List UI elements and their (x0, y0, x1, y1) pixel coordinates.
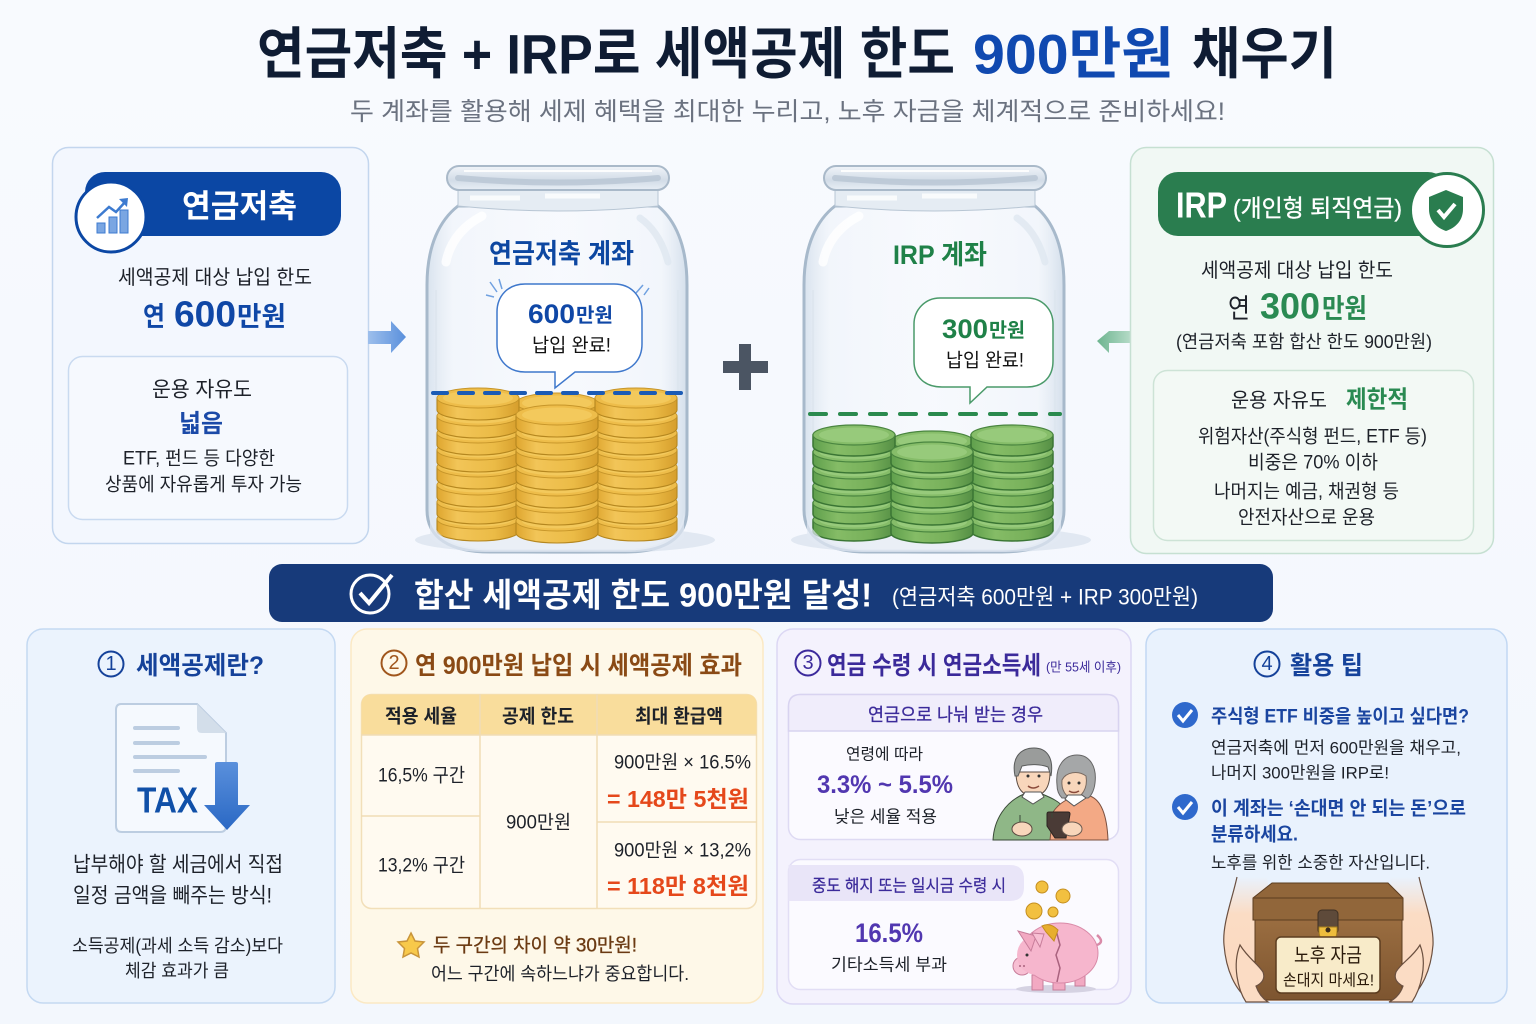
icon: star (398, 933, 424, 957)
jar: IRP 계좌 (791, 166, 1091, 554)
box: 운용 자유도 제한적: 위험자산(주식형 펀드, ETF 등) (1198, 425, 1427, 447)
illustration: locked chest in hands (1224, 877, 1433, 1002)
icon: growth chart (76, 182, 146, 252)
table: 환급액 (361, 694, 757, 908)
box: 운용 자유도: 넓음 (179, 410, 223, 438)
heading: 활용 팁 (1290, 652, 1363, 680)
label: 납입 한도: 세액공제 대상 납입 한도 (118, 266, 312, 289)
value: 연 300만원: 연 (1228, 294, 1250, 324)
box: 운용 자유도 제한적: 비중은 70% 이하 (1248, 451, 1378, 473)
heading: 3 (802, 652, 814, 674)
table: 환급액: 900만원 (506, 811, 571, 833)
value: 연 300만원: 300 (1260, 285, 1320, 326)
icon: tax document: TAX (137, 779, 198, 820)
tip 1: 주식형 ETF 비중을 높이고 싶다면? (1211, 705, 1469, 727)
callout: 600만원 납입 완료: 600 (528, 299, 575, 329)
box: 운용 자유도: ETF, 펀드 등 다양한 (123, 447, 275, 469)
table: 환급액: 공제 한도 (502, 705, 574, 727)
pill header: IRP (1158, 172, 1448, 236)
box: 연금 수령: 연금으로 나눠 받는 경우 (868, 705, 1043, 725)
arrow: to IRP jar (1097, 331, 1130, 353)
icon: check 1 (1172, 702, 1198, 728)
table: 환급액: = 118만 8천원 (607, 873, 749, 899)
tip 2: 노후를 위한 소중한 자산입니다. (1211, 853, 1430, 872)
box: 운용 자유도 제한적: 안전자산으로 운용 (1238, 506, 1375, 528)
box: 운용 자유도: 운용 자유도 (152, 378, 252, 401)
note: 구간 차이 (431, 934, 689, 984)
box: 일시금 수령: 기타소득세 부과 (831, 955, 947, 974)
box: 일시금 수령: 중도 해지 또는 일시금 수령 시 (812, 876, 1006, 895)
banner: 합산 한도 달성 (269, 564, 1273, 622)
note: 구간 차이: 두 구간의 차이 약 30만원! (433, 934, 637, 956)
tip 2: 분류하세요. (1211, 823, 1298, 845)
value: 연 600만원 (143, 293, 286, 334)
box: 일시금 수령 (788, 860, 1118, 990)
heading (1254, 652, 1363, 680)
heading: 4 (1261, 653, 1273, 675)
callout: 300만원 납입 완료 (914, 298, 1053, 403)
table: 환급액: 900만원 × 13,2% (614, 839, 751, 861)
note: 구간 차이: 어느 구간에 속하느냐가 중요합니다. (431, 964, 689, 984)
limit line: blue dashed (433, 391, 682, 395)
tip 1: 나머지 300만원을 IRP로! (1211, 763, 1389, 782)
callout: 600만원 납입 완료 (486, 279, 649, 388)
panel: ③ 연금소득세 (777, 629, 1131, 1004)
icon: tax document (116, 704, 250, 832)
text: 설명 (73, 853, 283, 907)
pill header: IRP: IRP (1176, 184, 1227, 225)
text: 비교 (72, 936, 283, 981)
title: 연금저축 + IRP로 세액공제 한도 (257, 22, 955, 85)
heading: 1 (105, 653, 117, 675)
icon: check 2 (1172, 794, 1198, 820)
box: 연금 수령: 낮은 세율 적용 (834, 807, 937, 826)
coins: gold stacks (437, 388, 677, 543)
text: 설명: 납부해야 할 세금에서 직접 (73, 853, 283, 876)
value: 연 600만원: 만원 (237, 302, 286, 332)
value: 연 300만원: 만원 (1322, 294, 1367, 324)
value: 연 600만원: 연 (143, 302, 165, 332)
callout: 600만원 납입 완료: 만원 (576, 304, 613, 327)
box: 운용 자유도 제한적: 나머지는 예금, 채권형 등 (1214, 480, 1399, 502)
callout: 300만원 납입 완료: 납입 완료! (946, 349, 1024, 371)
callout: 600만원 납입 완료: 납입 완료! (532, 334, 611, 356)
jar: 연금저축 계좌 (415, 166, 715, 554)
panel: ① 세액공제란 (27, 629, 335, 1003)
heading: 세액공제란? (136, 652, 264, 680)
text: 설명: 일정 금액을 빼주는 방식! (73, 884, 272, 907)
box: 운용 자유도 제한적: 운용 자유도 (1231, 389, 1327, 412)
title: 채우기 (1192, 22, 1337, 85)
jar label: 연금저축 계좌 (489, 239, 634, 269)
pill header: 연금저축 (85, 172, 341, 236)
value: 연 600만원: 600 (174, 293, 236, 334)
subtitle: 두 계좌를 활용해 세제 혜택을 최대한 누리고, 노후 자금을 체계적으로 준비하세요! (350, 98, 1225, 126)
pill header: 연금저축: 연금저축 (182, 188, 297, 224)
table: 환급액: = 148만 5천원 (607, 786, 749, 812)
icon: check circle (351, 575, 392, 613)
box: 연금 수령 (788, 694, 1118, 840)
illustration: locked chest in hands: 손대지 마세요! (1283, 971, 1374, 989)
table: 환급액: 13,2% 구간 (378, 854, 465, 876)
pill header: IRP: (개인형 퇴직연금) (1233, 195, 1402, 222)
callout: 300만원 납입 완료: 300 (942, 314, 988, 344)
icon: shield check (1410, 174, 1484, 246)
note: 합산 한도: (연금저축 포함 합산 한도 900만원) (1176, 332, 1432, 352)
banner: 합산 한도 달성: 합산 세액공제 한도 900만원 달성! (414, 576, 872, 613)
heading: 2 (388, 652, 400, 674)
panel: ② 세액공제 효과 (351, 629, 763, 1003)
box: 운용 자유도 제한적: 제한적 (1346, 386, 1408, 413)
coins: green stacks (813, 425, 1053, 543)
jar label: IRP 계좌 (893, 240, 987, 270)
table: 환급액: 최대 환급액 (635, 705, 723, 727)
plus sign (723, 344, 768, 390)
tip 2: 이 계좌는 ‘손대면 안 되는 돈’으로 (1211, 797, 1466, 819)
box: 운용 자유도 제한적 (1154, 370, 1474, 540)
limit line: green dashed (810, 412, 1060, 416)
box: 운용 자유도 (68, 356, 348, 520)
value: 연 300만원 (1228, 285, 1367, 326)
heading: 연 900만원 납입 시 세액공제 효과 (415, 652, 742, 680)
box: 연금 수령: 연령에 따라 (846, 745, 923, 763)
table: 환급액: 적용 세율 (385, 705, 457, 727)
text: 비교: 소득공제(과세 소득 감소)보다 (72, 936, 283, 956)
illustration: locked chest in hands: 노후 자금 (1294, 944, 1362, 967)
title: 900만원 (973, 22, 1174, 85)
tip 1: 연금저축에 먼저 600만원을 채우고, (1211, 738, 1461, 757)
box: 일시금 수령: 16.5% (855, 918, 923, 948)
banner: 합산 한도 달성: (연금저축 600만원 + IRP 300만원) (892, 584, 1198, 609)
title (257, 22, 1337, 85)
panel: IRP (1130, 148, 1494, 554)
panel: ④ 활용 팁 (1146, 629, 1507, 1003)
heading: (만 55세 이후) (1046, 659, 1121, 674)
box: 운용 자유도: 상품에 자유롭게 투자 가능 (105, 473, 302, 495)
illustration: senior couple (993, 748, 1108, 840)
text: 비교: 체감 효과가 큼 (125, 961, 229, 981)
heading: 연금 수령 시 연금소득세 (827, 652, 1041, 680)
box: 연금 수령: 3.3% ~ 5.5% (817, 771, 953, 799)
table: 환급액: 16,5% 구간 (378, 764, 465, 786)
illustration: piggy bank (1013, 881, 1101, 993)
arrow: to pension jar (368, 321, 406, 353)
panel: 연금저축 (52, 148, 368, 544)
callout: 300만원 납입 완료: 만원 (989, 319, 1025, 342)
label: 납입 한도: 세액공제 대상 납입 한도 (1201, 259, 1393, 282)
table: 환급액: 900만원 × 16.5% (614, 751, 751, 773)
tip 1 (1211, 705, 1469, 782)
tip 2 (1211, 797, 1466, 872)
